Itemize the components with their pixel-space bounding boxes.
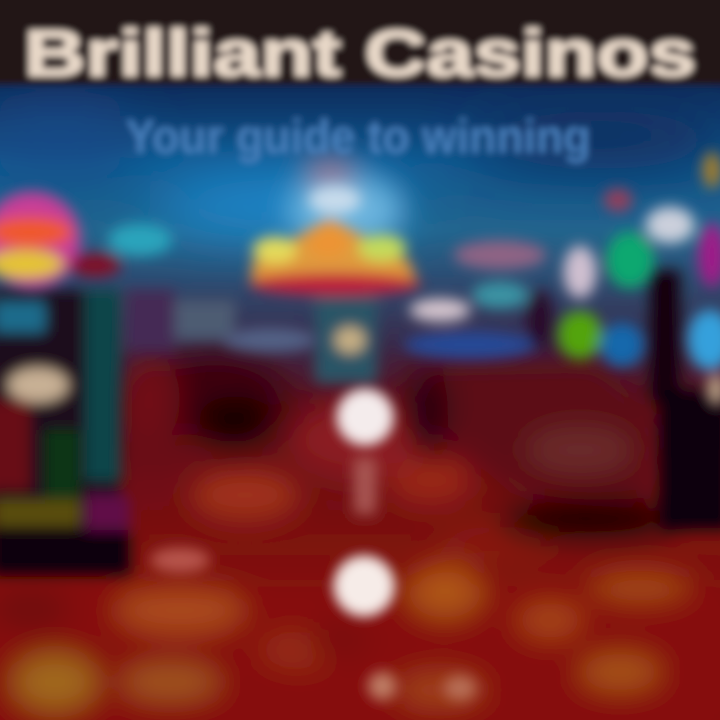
slot machine: left	[0, 290, 235, 575]
light: trail	[354, 458, 376, 514]
icon: coloured lights right	[558, 152, 720, 406]
centre bands	[224, 241, 554, 359]
seating: right	[405, 360, 675, 536]
floor text smudges	[150, 548, 476, 700]
sky glow	[0, 107, 720, 233]
subtitle: Your guide to winning	[126, 111, 590, 164]
floor	[0, 400, 720, 720]
title: Brilliant Casinos	[24, 16, 696, 90]
seating: left	[120, 353, 285, 446]
chandelier	[249, 158, 421, 383]
light: lower white	[334, 556, 394, 616]
icon: rainbow circle	[0, 192, 172, 288]
top band	[0, 0, 720, 85]
light: upper white	[337, 389, 393, 445]
dark machine: far right	[650, 270, 720, 530]
